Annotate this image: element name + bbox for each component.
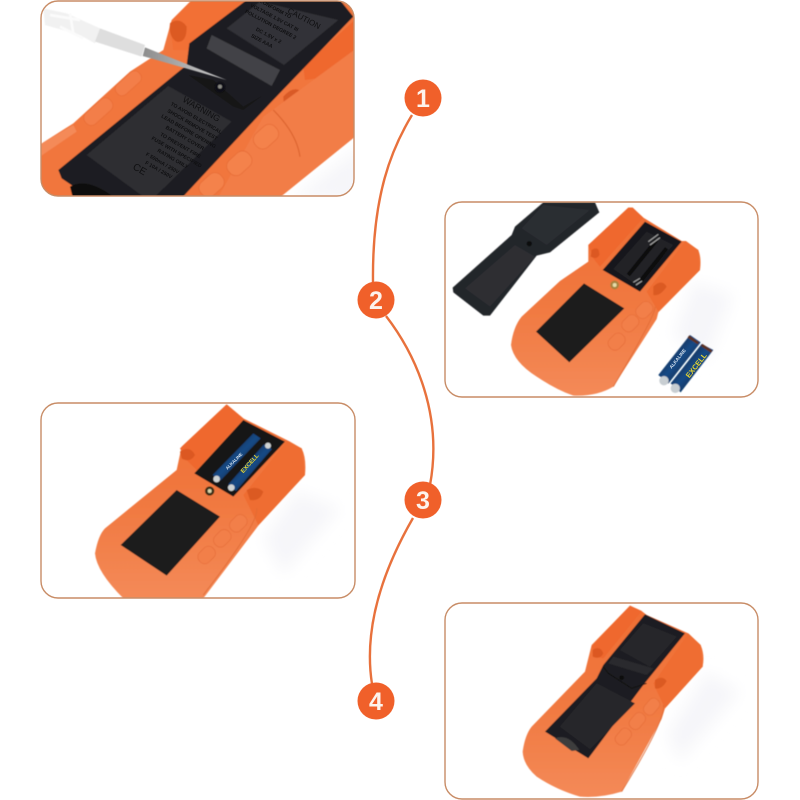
panel: step 1 remove screw — [30, 0, 370, 202]
photo: multimeter with batteries in compartment: EXCELL — [240, 453, 261, 475]
step badge 4: 4 — [369, 688, 383, 716]
multimeter body — [95, 404, 305, 598]
warning label text: LEAD BEFORE OPENING — [160, 114, 217, 150]
panel: step 3 batteries installed — [40, 402, 356, 599]
warning label text: CE — [131, 162, 148, 178]
panel border — [445, 202, 758, 397]
screw post — [610, 281, 619, 289]
black battery cover — [545, 614, 685, 758]
installed batteries — [213, 433, 261, 480]
step badge 4 — [358, 682, 394, 720]
connector: curved line 3 to 4 — [370, 518, 413, 684]
loose AAA batteries — [658, 335, 701, 384]
warning label text: TO PREVENT FIRE — [159, 132, 202, 160]
panel: step 2 cover removed and batteries out — [444, 201, 759, 398]
panel border — [41, 403, 355, 598]
battery compartment — [603, 222, 682, 292]
grip ridges — [608, 342, 625, 350]
step badge 2: 2 — [369, 287, 383, 315]
multimeter body — [523, 606, 703, 797]
warning label text: F 10A / 250V — [144, 160, 173, 181]
black battery cover — [58, 0, 353, 200]
warning label text: WARNING — [181, 94, 222, 124]
step badge 3: 3 — [416, 487, 430, 515]
photo: open multimeter, loose cover and batteries — [452, 202, 718, 396]
step badge 3 — [404, 482, 442, 518]
photo: multimeter with batteries in compartment — [94, 404, 321, 598]
rectangular rear recess — [121, 490, 220, 576]
warning label text — [134, 96, 221, 178]
caution label text: VOLTAGE 1.5V CAT III — [249, 3, 300, 34]
warning label text: FUSE WITH SPECIFIED — [150, 136, 203, 170]
connector: curved line 1 to 2 — [373, 115, 412, 282]
step badge 1 — [404, 80, 442, 116]
warning label text: SHOCK REMOVE TEST — [166, 108, 219, 142]
step badge 1: 1 — [416, 85, 430, 113]
photo: open multimeter, loose cover and batteries: EXCELL — [684, 351, 709, 380]
grip ridges — [198, 546, 216, 564]
step badge 2 — [358, 282, 394, 318]
warning label text: RATING ONLY — [156, 148, 189, 171]
panel: step 4 cover replaced — [440, 595, 773, 800]
photo: open multimeter, loose cover and batteries: ALKALINE — [668, 348, 687, 370]
loose battery cover — [453, 202, 599, 316]
photo: multimeter with cover closed — [522, 604, 722, 798]
panel border — [41, 1, 354, 196]
caution label text: POLLUTION DEGREE 2 — [244, 9, 297, 41]
caution label text: CAUTION — [286, 6, 322, 31]
screwdriver — [43, 8, 227, 93]
photo: multimeter back with screwdriver — [42, 2, 354, 196]
panel border — [445, 603, 758, 799]
caution label text: SIZE AAA — [250, 33, 274, 50]
grip ridges — [615, 733, 627, 746]
multimeter body — [37, 0, 363, 200]
upper label recess — [227, 2, 338, 65]
lower label recess — [87, 86, 232, 197]
connector: curved line 2 to 3 — [386, 316, 433, 485]
warning label text: BATTERY COVER — [164, 125, 205, 152]
rectangular rear recess — [536, 283, 624, 362]
cover notch — [555, 737, 579, 751]
warning label text: TO AVOID ELECTRICAL — [169, 101, 223, 136]
warning label text: F 500mA / 250V — [144, 152, 180, 176]
battery compartment — [194, 420, 285, 497]
photo: multimeter with batteries in compartment: ALKALINE — [224, 452, 244, 471]
caution label text — [245, 2, 321, 48]
screw post — [205, 486, 214, 496]
caution label text: DC 1.5V x 2 — [255, 27, 282, 45]
multimeter body — [511, 208, 701, 396]
hinge plate — [207, 35, 280, 86]
